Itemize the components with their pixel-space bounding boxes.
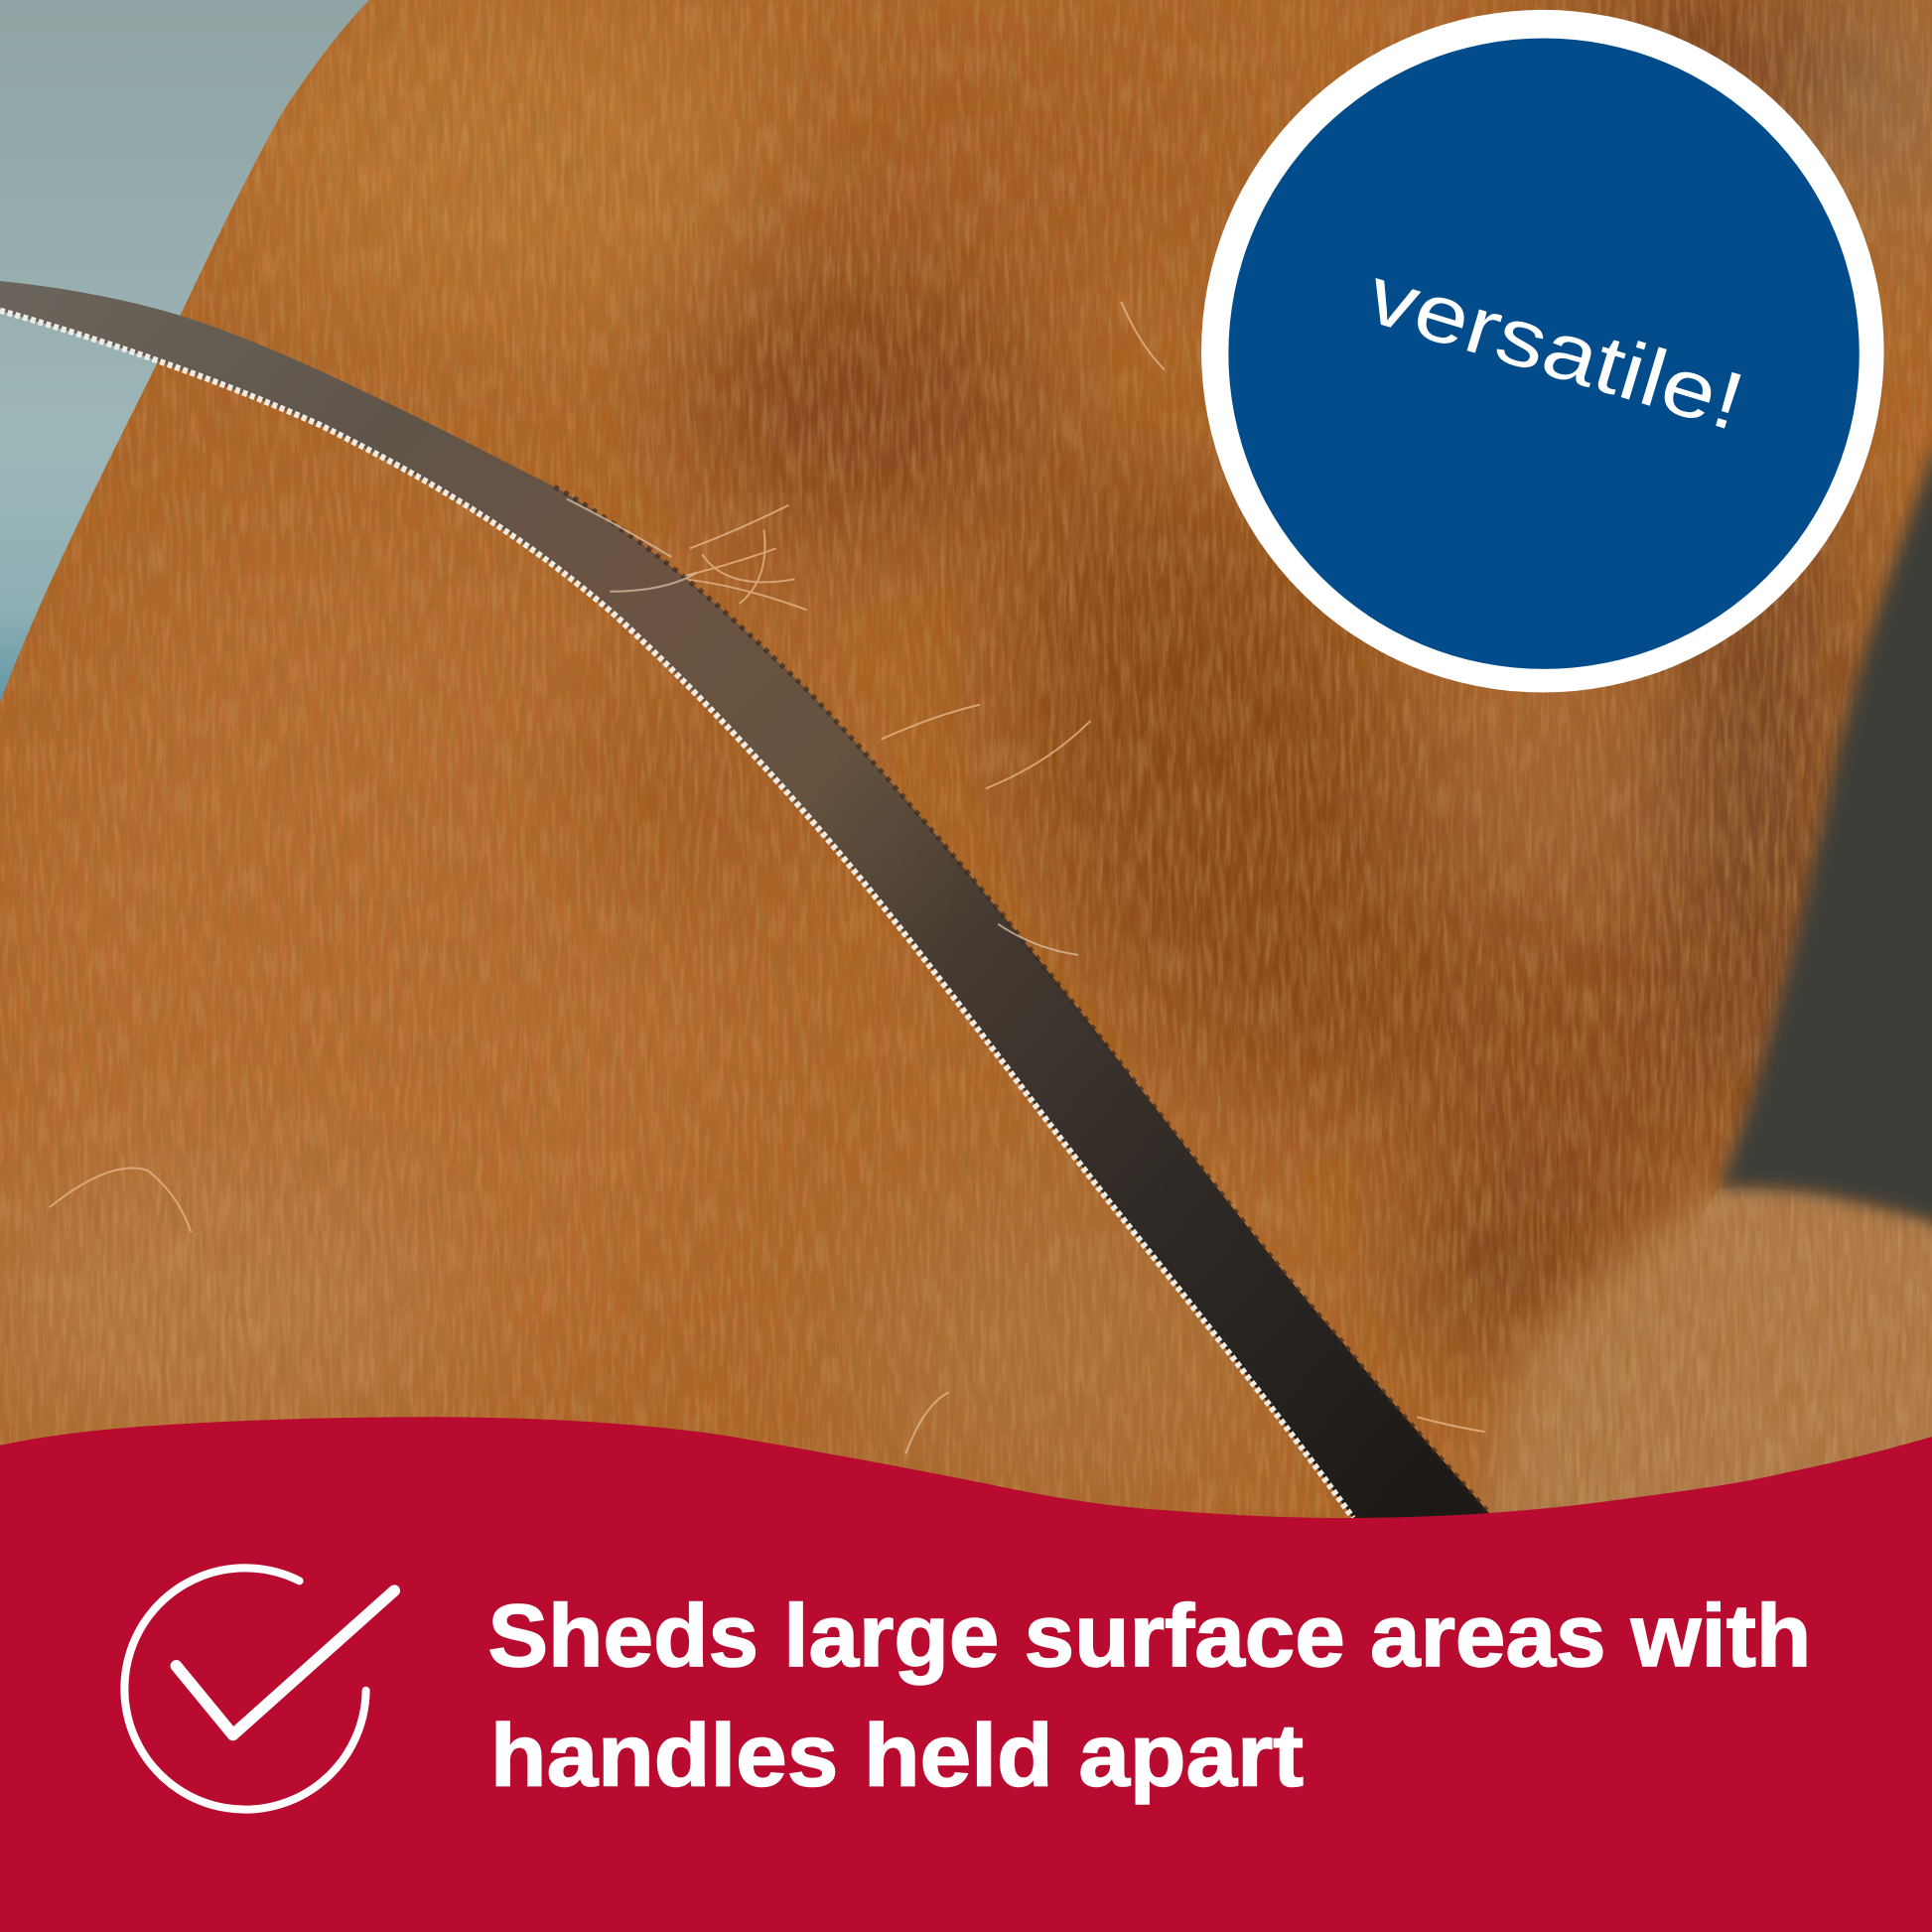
dark background beyond the dog on the right — [1719, 407, 1932, 1238]
paw area — [1473, 1175, 1932, 1513]
white serrated lower edge — [0, 311, 1353, 1518]
badge blue disc — [1228, 38, 1860, 669]
blade body — [0, 281, 1493, 1518]
fur texture: dark strands — [0, 0, 1932, 1528]
callout badge: versatile! — [1201, 10, 1884, 692]
red wave banner — [0, 1417, 1932, 1932]
icon: check mark in circle — [124, 1568, 394, 1810]
stray hairs — [50, 302, 1484, 1453]
badge white ring — [1201, 10, 1884, 692]
photo background: grey-blue sofa — [0, 0, 492, 740]
caption text — [487, 1586, 1811, 1804]
caption text: Sheds large surface areas with — [487, 1586, 1811, 1685]
trapped hair on blade — [567, 499, 1078, 955]
badge text: versatile! — [1357, 250, 1754, 448]
fur texture: light strands — [0, 0, 1932, 1528]
dark serrated upper edge — [554, 486, 1493, 1518]
caption text: handles held apart — [490, 1705, 1304, 1804]
grooming blade — [0, 281, 1493, 1518]
